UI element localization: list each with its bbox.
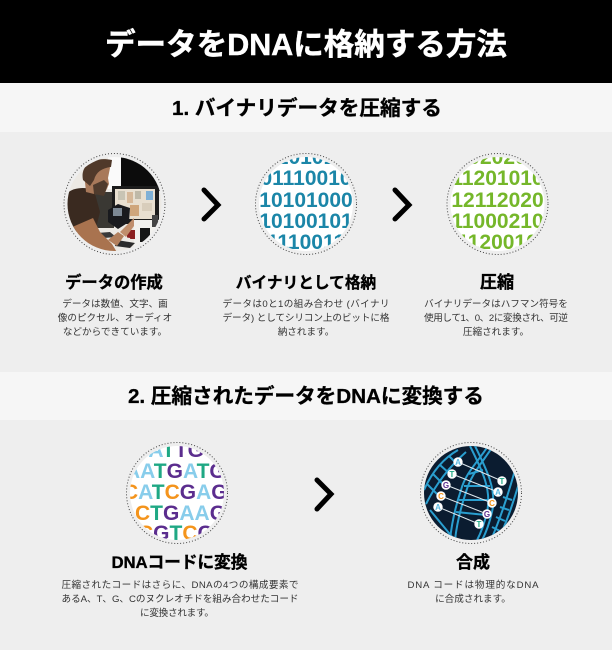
step: data creation text: などからできています。 [63, 327, 167, 338]
step: synthesis text: DNA コードは物理的なDNA [408, 579, 539, 591]
section heading 2: 2. 圧縮されたデータをDNAに変換する [128, 384, 484, 408]
DNA letters circle: CGTCC [138, 522, 213, 545]
step: store as binary text: データ) としてシリコン上のビットに格 [222, 312, 390, 324]
DNA helix circle: C [438, 492, 444, 501]
photo: person creating data [64, 153, 166, 255]
ternary circle: 2020200 [457, 146, 538, 169]
DNA helix circle: T [500, 477, 505, 486]
step: synthesis text [408, 552, 539, 605]
DNA helix circle [420, 442, 522, 544]
title banner [0, 0, 612, 83]
step: store as binary text: データは0と1の組み合わせ (バイナリ [222, 298, 390, 310]
panel: section 2 [62, 442, 538, 617]
ternary circle [447, 146, 548, 254]
DNA helix circle: C [489, 499, 495, 508]
ternary circle: 11201010 [451, 167, 544, 190]
ternary circle: 11000210 [451, 210, 544, 233]
binary circle: 10101000 [259, 189, 353, 212]
step: compression text: 使用して1、0、2に変換され、可逆 [424, 312, 568, 324]
arrow [395, 190, 409, 219]
step: compression text: バイナリデータはハフマン符号を [424, 298, 568, 310]
binary circle: 01110010 [260, 167, 352, 190]
step: DNA code text: に変換されます。 [140, 607, 214, 619]
section heading 1: 1. バイナリデータを圧縮する [172, 96, 442, 120]
step: store as binary text: バイナリとして格納 [236, 273, 376, 292]
DNA letters circle [123, 439, 228, 545]
DNA helix circle: G [484, 510, 490, 519]
arrow [204, 190, 218, 219]
binary circle: 1110011 [267, 231, 345, 254]
binary circle [256, 146, 356, 254]
ternary circle: 12112020 [451, 189, 544, 212]
section heading 1 [0, 83, 612, 132]
title banner: データをDNAに格納する方法 [105, 27, 507, 62]
step: data creation text [58, 273, 172, 338]
ternary circle: 1120010 [457, 231, 538, 254]
step: DNA code text [62, 553, 298, 619]
binary circle: 0101010 [265, 146, 347, 169]
step: compression text: 圧縮 [480, 273, 514, 292]
step: DNA code text: あるA、T、G、Cのヌクレオチドを組み合わせたコード [62, 593, 298, 605]
DNA letters circle: CATCGAG [123, 481, 228, 504]
section heading 2 [0, 372, 612, 420]
step: DNA code text: DNAコードに変換 [112, 553, 248, 572]
step: data creation text: 像のピクセル、オーディオ [58, 312, 172, 324]
DNA helix circle: A [495, 488, 501, 497]
binary circle: 10100101 [259, 210, 353, 233]
step: DNA code text: 圧縮されたコードはさらに、DNAの4つの構成要素で [62, 579, 298, 591]
DNA helix circle: G [443, 481, 449, 490]
DNA helix circle: T [477, 520, 482, 529]
arrow [317, 480, 331, 509]
DNA helix circle: A [455, 458, 461, 467]
step: data creation text: データの作成 [65, 273, 163, 292]
DNA letters circle: CTGAAG [135, 502, 226, 525]
step: store as binary text [222, 273, 390, 338]
DNA letters circle: GATTG [132, 439, 204, 462]
panel: section 1 [58, 153, 568, 336]
DNA letters circle: AATGATG [125, 460, 226, 483]
step: data creation text: データは数値、文字、画 [62, 298, 168, 310]
step: synthesis text: に合成されます。 [435, 593, 511, 605]
step: compression text: 圧縮されます。 [463, 326, 529, 338]
DNA helix circle: T [450, 470, 455, 479]
step: compression text [424, 273, 568, 338]
DNA helix circle: A [435, 503, 441, 512]
step: synthesis text: 合成 [456, 552, 490, 572]
step: store as binary text: 納されます。 [278, 326, 334, 338]
